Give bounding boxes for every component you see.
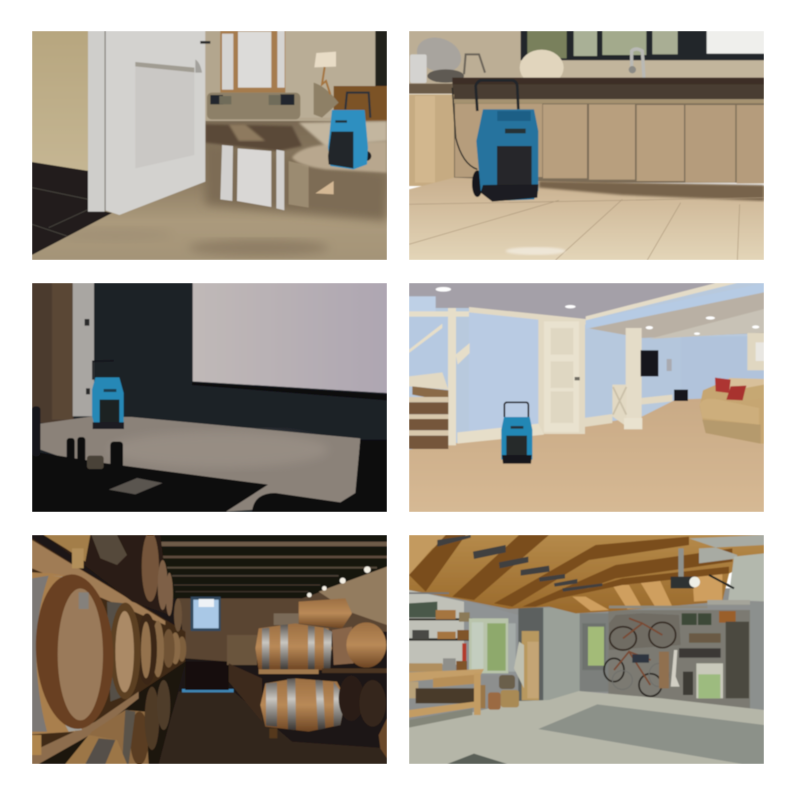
ceiling and soffit: [409, 283, 764, 339]
garage door opener and rails: [609, 535, 764, 608]
largest barrel: [32, 572, 82, 734]
blue walls: [409, 283, 764, 450]
projection screen: [192, 283, 387, 400]
floor lamp: [314, 52, 336, 94]
dehumidifier: [92, 361, 124, 429]
left barrel rack: [32, 532, 186, 765]
dark tiled floor and wall: [32, 31, 112, 255]
panel: wine barrel cellar: [32, 535, 387, 764]
right barrels, middle row: [332, 627, 354, 665]
open white door: [88, 31, 210, 215]
panel: garage: [409, 535, 764, 764]
dark countertop: [409, 78, 764, 99]
lower row barrels: [65, 710, 149, 764]
concrete floor: [409, 691, 764, 764]
panel: home theater: [32, 283, 387, 512]
beige cabinets: [409, 94, 764, 186]
wooden workbench: [409, 658, 485, 718]
smaller barrels receding: [178, 636, 186, 662]
column and railing: [612, 328, 642, 429]
wet floor: [32, 121, 387, 260]
cellar background: [32, 535, 387, 764]
cellar brick floor: [157, 662, 387, 764]
panel: finished basement: [409, 283, 764, 512]
basement window: [747, 333, 764, 370]
grey floor mat: [538, 704, 764, 764]
ceiling metal plates: [437, 535, 602, 592]
ceiling beams: [155, 535, 387, 598]
right barrel stacks: [227, 598, 387, 758]
bench shadow: [409, 708, 472, 728]
panel: wet kitchen: [409, 31, 764, 260]
beige sofa: [700, 378, 764, 444]
round white ball: [520, 50, 564, 86]
carpet floor: [409, 396, 764, 512]
pegboard tools: [659, 611, 749, 698]
wooden ceiling: [409, 535, 764, 613]
kitchen back wall: [409, 31, 764, 88]
dehumidifier: [452, 80, 538, 202]
middle row receding: [227, 635, 257, 665]
dehumidifier: [501, 402, 532, 464]
dehumidifier: [328, 93, 371, 169]
panel: flooded living room: [32, 31, 387, 260]
shelving with pots: [409, 592, 472, 662]
wall TV: [641, 350, 688, 401]
small mat at bottom: [447, 754, 507, 764]
top barrel: [299, 598, 352, 628]
dark wall: [32, 283, 387, 512]
staircase: [409, 324, 470, 449]
window reflection: [220, 145, 309, 210]
tiled wet floor: [409, 178, 764, 260]
wood panel and white wall: [32, 283, 94, 423]
kitchen utensils: [410, 32, 485, 83]
black table and objects: [32, 406, 268, 512]
stone wall and window: [179, 566, 387, 662]
sofa: [207, 93, 300, 119]
upper row barrels: [44, 535, 170, 615]
carpet floor: [40, 416, 360, 512]
faucet: [629, 49, 644, 84]
pallet: [259, 669, 319, 674]
trim and white door: [448, 308, 672, 445]
windows: [469, 618, 606, 673]
second barrel: [107, 602, 140, 702]
black armchair: [252, 440, 387, 512]
living room background: [32, 31, 387, 260]
grey walls: [409, 588, 764, 722]
wooden column and decor: [488, 631, 539, 710]
lower row: [229, 663, 262, 722]
bicycles on wall: [604, 613, 681, 696]
